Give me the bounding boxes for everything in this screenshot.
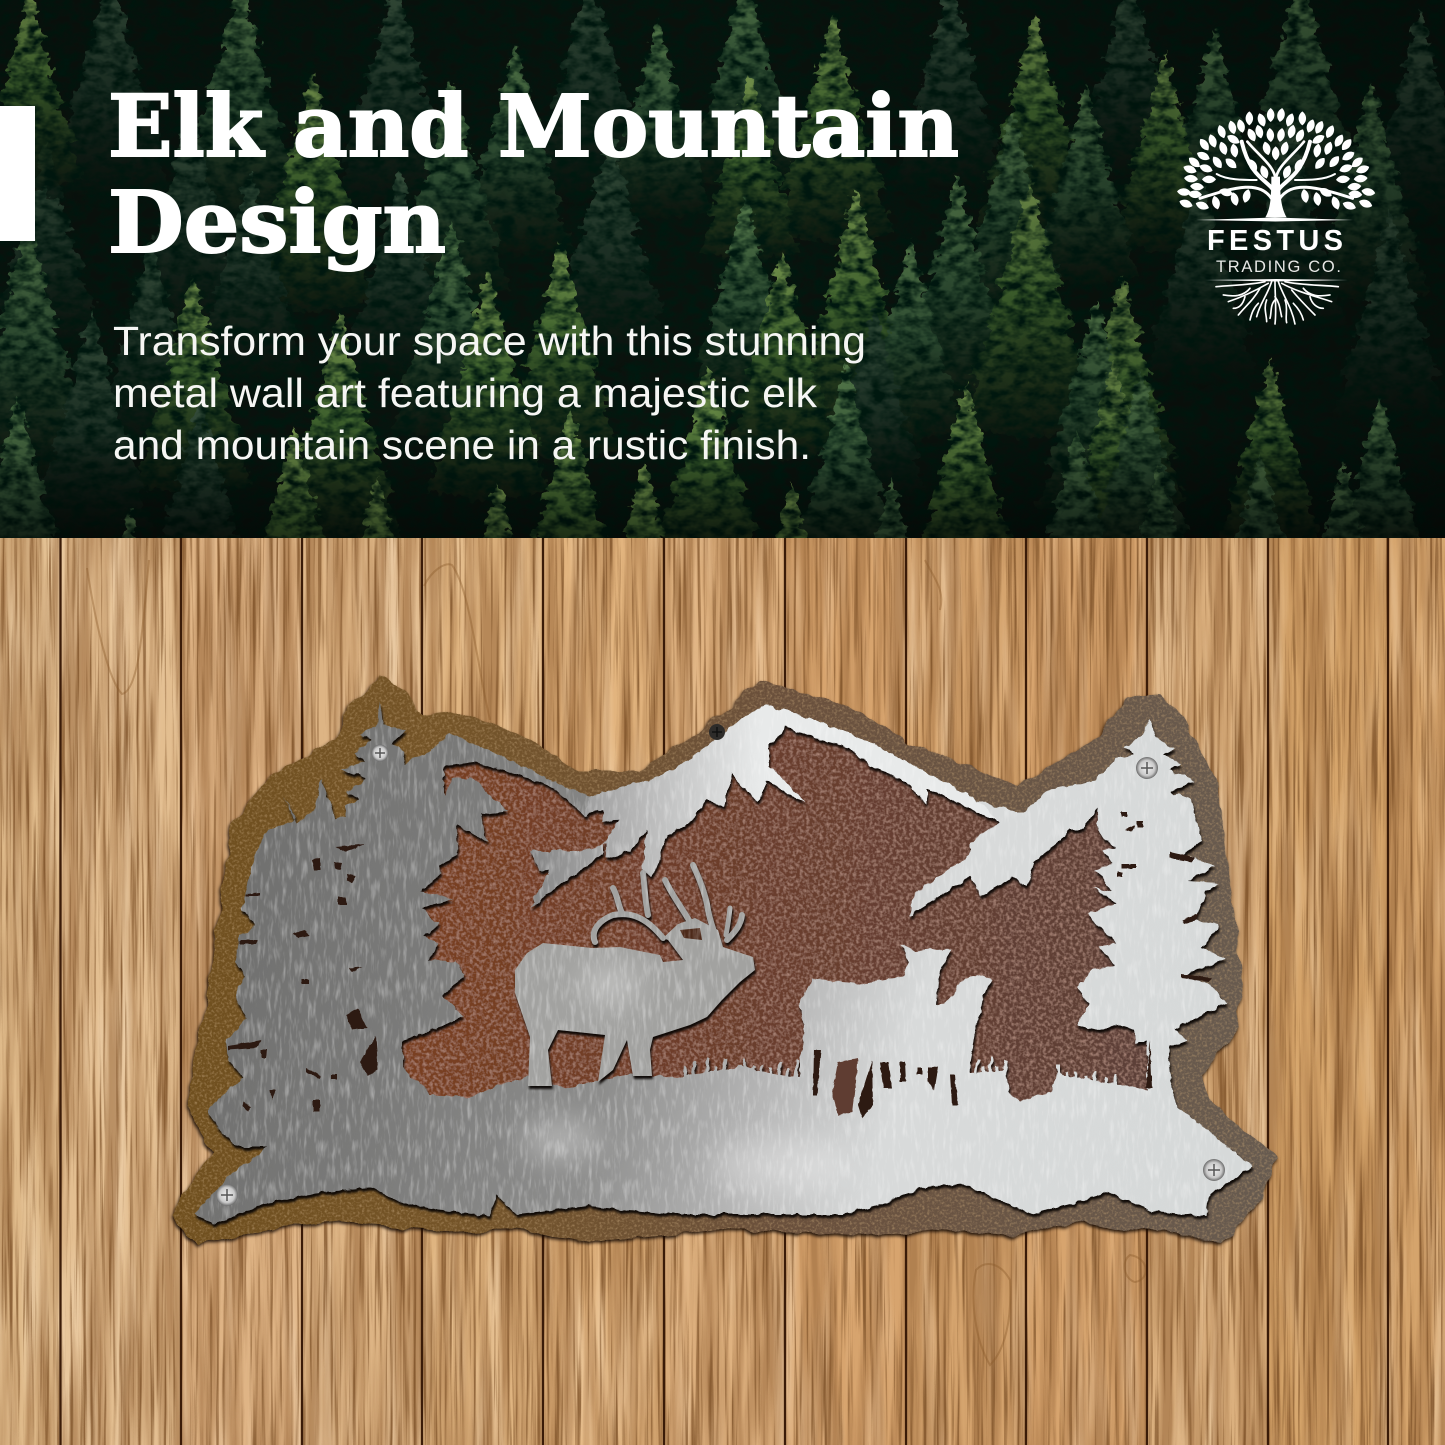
snow-capped mountain peak — [530, 705, 999, 907]
elk body — [515, 918, 755, 1086]
title — [108, 77, 959, 273]
metal silhouette: trees, ridge and ground — [194, 701, 1252, 1225]
logo tagline: TRADING CO. — [1216, 258, 1341, 276]
backing plate — [171, 676, 1277, 1245]
title: Elk and Mountain — [108, 77, 959, 177]
elk head holes — [680, 928, 702, 940]
brushed metal cut-out — [194, 701, 1252, 1225]
subtitle text: and mountain scene in a rustic finish. — [113, 422, 811, 468]
rust interior — [403, 727, 1147, 1101]
title: Design — [108, 173, 446, 273]
forest background photo — [0, 0, 1445, 669]
cut-out holes and slits — [228, 812, 1212, 1118]
adult elk cow and calf — [799, 944, 993, 1110]
grass tufts — [684, 1056, 1116, 1090]
subtitle text: Transform your space with this stunning — [113, 318, 866, 364]
subtitle text: metal wall art featuring a majestic elk — [113, 370, 818, 416]
metal sheen highlights — [520, 965, 850, 1193]
white accent bar — [0, 106, 35, 241]
logo wordmark: FESTUS — [1207, 225, 1343, 257]
panel: metal wall art — [171, 676, 1277, 1245]
subtitle text — [113, 318, 866, 468]
logo: Festus Trading Co. — [1177, 107, 1376, 324]
screw heads — [216, 724, 1225, 1206]
wood cathedral grain and knots — [87, 560, 1146, 1365]
icon: tree canopy and trunk — [1177, 107, 1376, 217]
divider lines — [1196, 218, 1353, 282]
elk antlers — [594, 865, 742, 942]
wood plank wall — [0, 538, 1445, 1445]
bull elk with antlers — [515, 865, 755, 1086]
icon: roots — [1216, 282, 1338, 324]
